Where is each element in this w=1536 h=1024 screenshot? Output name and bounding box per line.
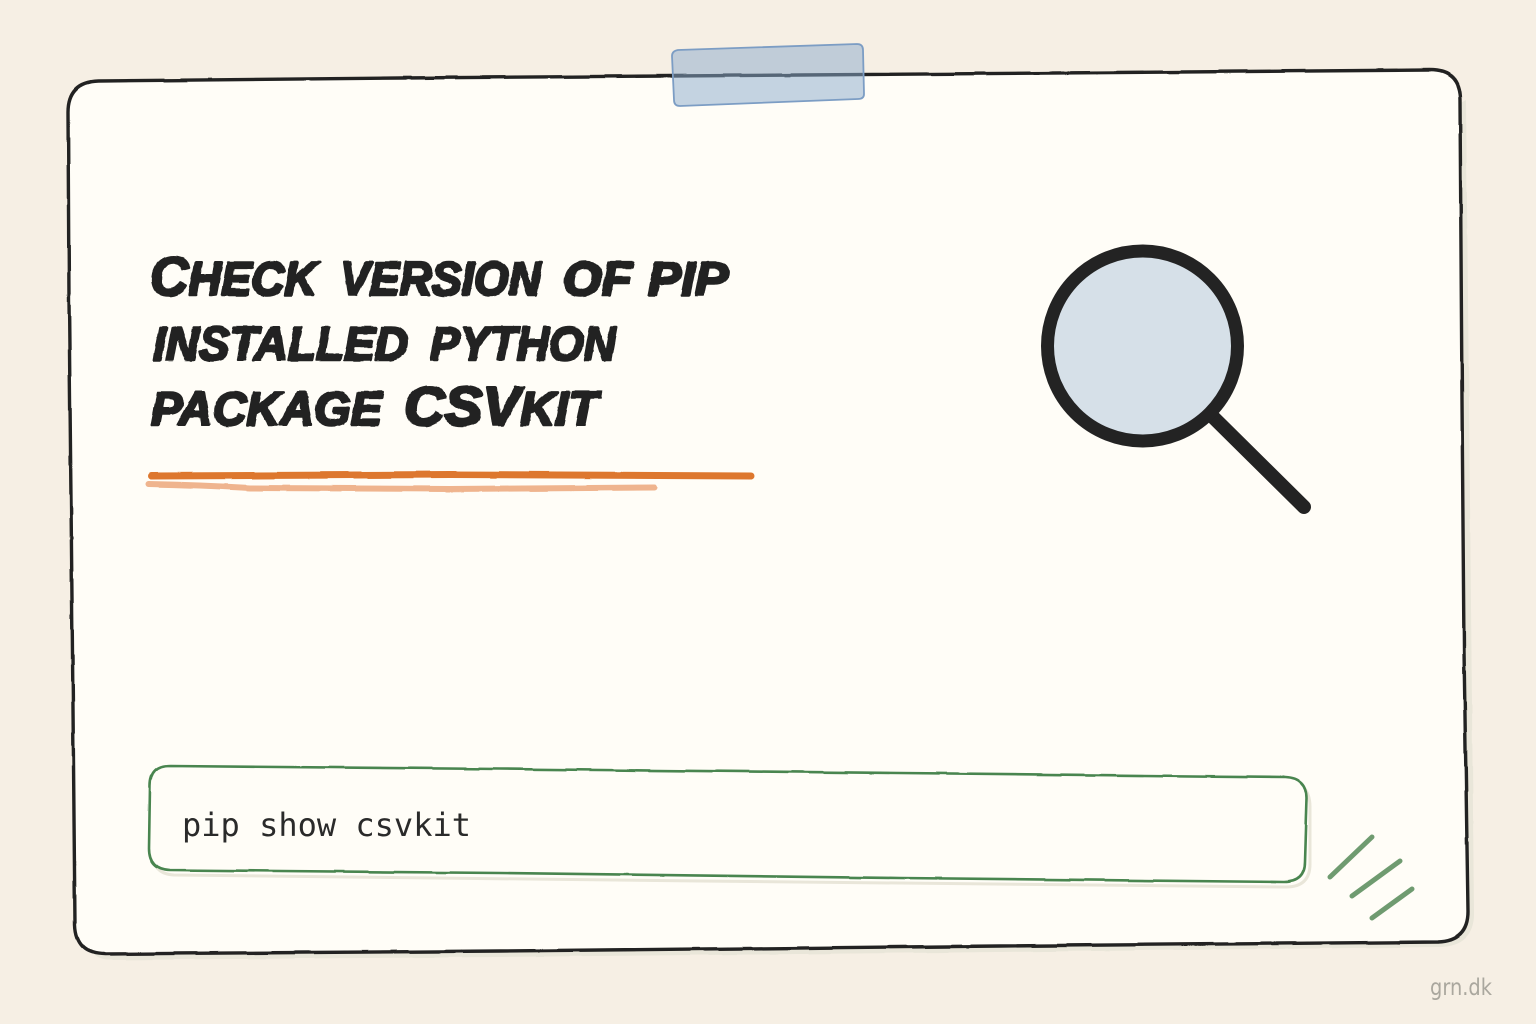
tape xyxy=(672,44,864,106)
command text: pip show csvkit xyxy=(182,806,471,844)
title: VERSION xyxy=(340,252,542,305)
title: CSVKIT xyxy=(404,375,602,437)
panel: main card xyxy=(68,70,1474,960)
title: PACKAGE xyxy=(151,382,384,435)
title: CHECK xyxy=(150,245,320,307)
title: OF xyxy=(563,252,633,305)
decorative green hatch marks xyxy=(1330,837,1412,918)
command box outline xyxy=(149,766,1307,882)
title underline xyxy=(148,474,751,489)
title: PYTHON xyxy=(430,317,617,370)
watermark: grn.dk xyxy=(1430,975,1493,1001)
title: PIP xyxy=(648,252,729,305)
title: INSTALLED xyxy=(153,317,408,370)
command box xyxy=(149,766,1310,887)
icon: magnifying glass xyxy=(1048,251,1304,507)
title xyxy=(150,245,729,437)
